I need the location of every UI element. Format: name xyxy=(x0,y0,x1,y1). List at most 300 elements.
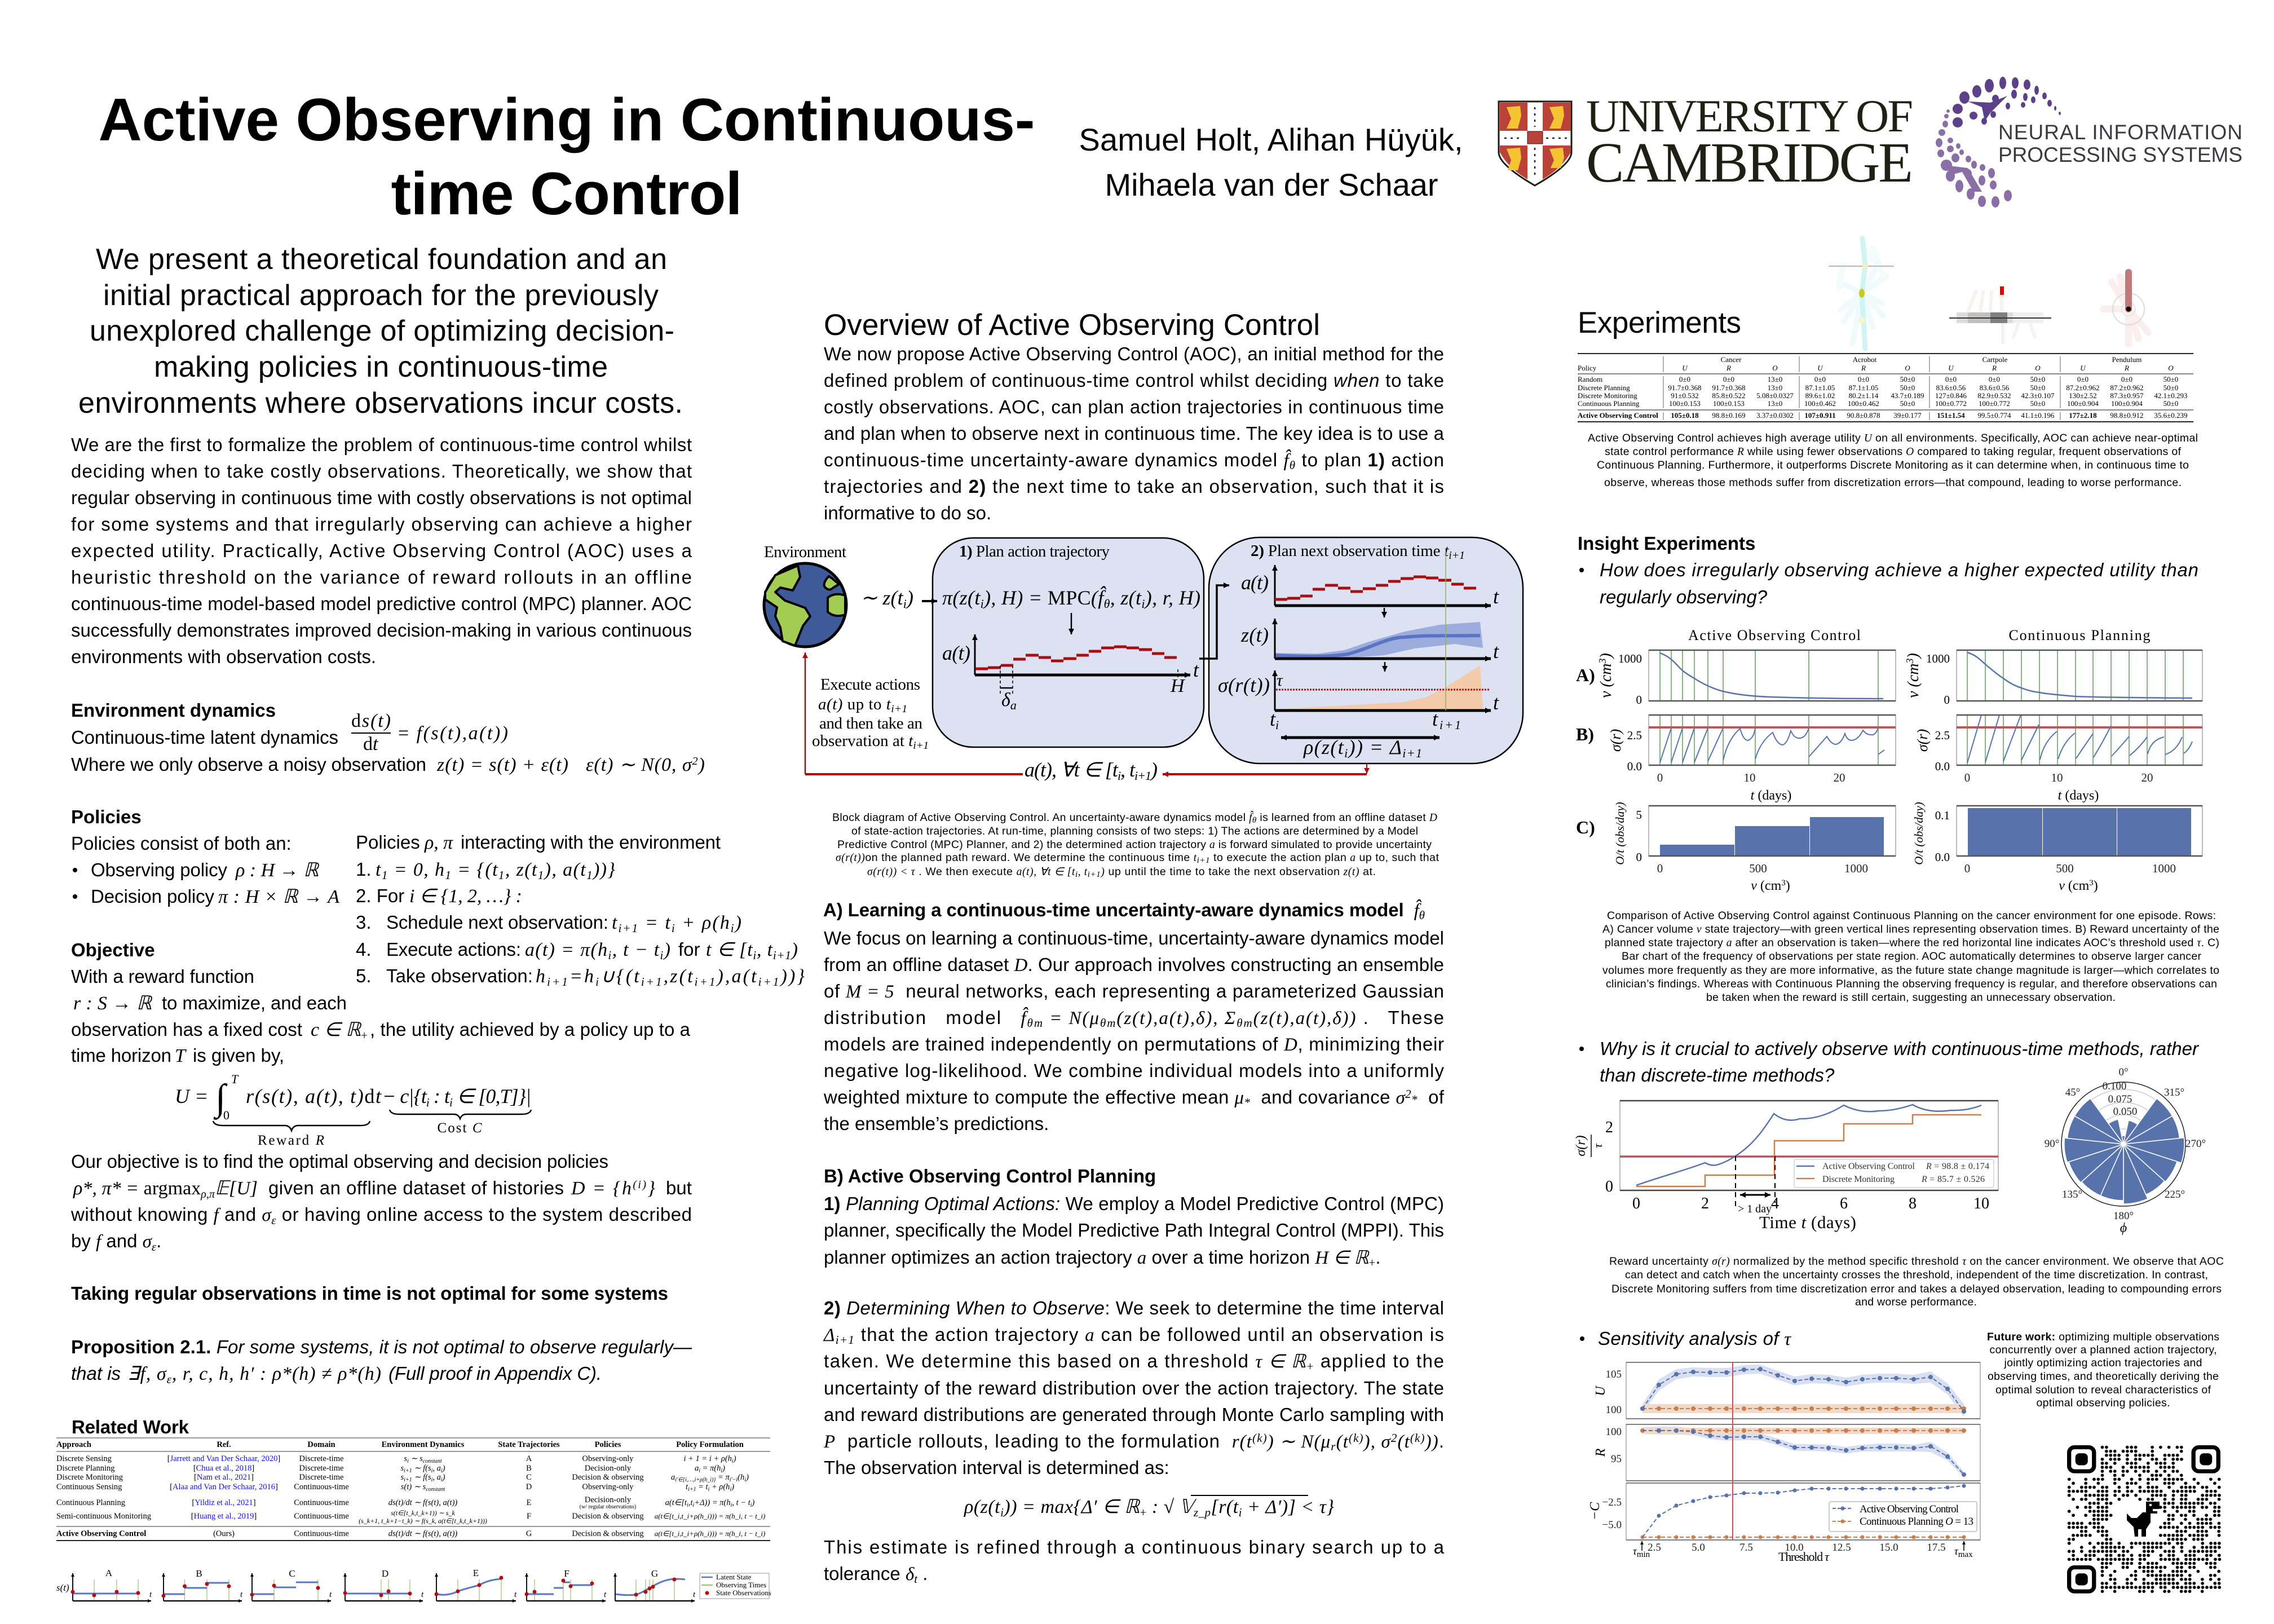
x axis labels: 7.5 xyxy=(1739,1542,1753,1554)
chart B left: uncertainty AOC: t (days) xyxy=(1751,788,1791,803)
section: B planning: applied to the xyxy=(1314,1351,1444,1371)
logo: University of Cambridge: CAMBRIDGE xyxy=(1586,131,1913,194)
equation: utility xyxy=(175,1072,531,1148)
arrow: plan into next observation xyxy=(1199,585,1229,659)
text block: diagram caption: σ(r(t))on the planned path reward. We determine the continuous time t xyxy=(836,851,1196,864)
x axis labels xyxy=(1633,1541,1973,1564)
list: interaction steps: 1 xyxy=(445,868,451,882)
text block: abstract paragraph: We are the first to formalize the problem of continuous-time control whilst xyxy=(71,434,692,455)
table rows: 43.7±0.189 xyxy=(1891,391,1924,400)
table rows: Active Observing Control xyxy=(56,1529,146,1538)
table rows: 13±0 xyxy=(1768,383,1782,392)
table header: R xyxy=(2124,364,2129,372)
section: objective: (i) xyxy=(633,1179,646,1191)
subplot: reward xyxy=(1593,1424,1980,1481)
section: environment dynamics: Environment dynamics xyxy=(71,700,276,721)
text block: abstract paragraph: for some systems and that irregularly observing can achieve a higher xyxy=(71,514,692,535)
text block: uncertainty caption: Reward uncertainty σ(r) normalized by the method specific threshold τ on the cancer environment. We observe that AOC xyxy=(1609,1255,2224,1268)
text block: execute actions: observation at t xyxy=(812,732,913,750)
x axis labels: 15.0 xyxy=(1879,1542,1898,1554)
table header xyxy=(56,1440,744,1449)
chart B left: uncertainty AOC: σ(r) xyxy=(1608,729,1624,752)
table: related work xyxy=(56,1438,770,1541)
table rows: 87.2±0.962 xyxy=(2110,383,2144,392)
label: observing policy equation: )) = Δ xyxy=(1348,736,1402,758)
QR data modules xyxy=(2069,1448,2220,1591)
chart: planned action a(t) xyxy=(942,634,1199,712)
chart: reward uncertainty sigma: σ(r(t)) xyxy=(1218,674,1270,696)
section: B planning: The observation interval is determined as: xyxy=(824,1457,1169,1478)
table header: R xyxy=(1992,364,1997,372)
table rows: +Δ)) = π(h xyxy=(694,1498,731,1507)
table header: Acrobot xyxy=(1853,355,1877,364)
chart: action a(t) xyxy=(1241,565,1499,608)
section: A learning dynamics xyxy=(823,899,1445,1134)
text block: abstract paragraph: heuristic threshold on the variance of reward rollouts in an offline xyxy=(71,567,692,588)
chart C left: observation frequency AOC: 500 xyxy=(1749,862,1767,875)
table rows: 0±0 xyxy=(1989,375,2000,383)
list: interaction steps: i xyxy=(753,948,756,962)
proposition: ∃f, σ xyxy=(127,1363,166,1384)
text block: diagram caption: a up to, such that xyxy=(1350,851,1439,864)
text block: intro statement: making policies in continuous-time xyxy=(154,351,608,383)
chart B right: uncertainty continuous planning: t (days) xyxy=(2058,788,2099,803)
chart: normalized reward uncertainty: 8 xyxy=(1909,1195,1917,1212)
table rows: 0±0 xyxy=(2121,375,2132,383)
table rows: Decision & observing xyxy=(572,1529,644,1538)
chart C right: observation frequency continuous planning: 500 xyxy=(2056,862,2074,875)
list: policy types: Decision policy xyxy=(91,886,214,907)
schematic A xyxy=(71,1568,152,1601)
subplot: reward: R xyxy=(1593,1448,1608,1457)
table header: R xyxy=(1861,364,1866,372)
chart: sensitivity analysis xyxy=(1588,1362,1980,1564)
section: A learning dynamics: weighted mixture to compute the effective mean μ xyxy=(824,1087,1244,1108)
text block: overview paragraph: We now propose Active Observing Control (AOC), an initial method for the xyxy=(824,343,1444,364)
table rows: ds(t)/dt ∼ f(s(t), a(t)) xyxy=(388,1529,457,1538)
section: environment dynamics: 2 xyxy=(692,755,698,767)
list: interaction steps: i xyxy=(660,948,664,962)
table rows: 91.7±0.368 xyxy=(1712,383,1746,392)
table header: Ref. xyxy=(217,1440,231,1449)
schematic A: A xyxy=(105,1568,113,1578)
proposition: ε xyxy=(167,1373,172,1386)
table rows: i xyxy=(731,1502,732,1508)
table rows: 80.2±1.14 xyxy=(1849,391,1879,400)
table rows: C xyxy=(526,1473,532,1482)
table rows: ) xyxy=(722,1464,725,1473)
panel: plan action trajectory: ), r, H) xyxy=(1144,586,1200,609)
text block: abstract paragraph xyxy=(71,434,692,667)
chart A right: cancer volume continuous planning: 0 xyxy=(1944,693,1950,707)
table rows: i xyxy=(441,1468,443,1474)
list: interaction steps: Policies xyxy=(356,832,420,853)
section: objective: D = {h xyxy=(571,1178,632,1199)
panel: plan action trajectory: 1) Plan action trajectory xyxy=(959,542,1110,561)
text block: overview paragraph: θ xyxy=(1290,458,1295,472)
label: observing policy equation: ρ(z(t xyxy=(1304,736,1344,758)
section: B planning: a can be followed until an observation is xyxy=(1085,1324,1444,1345)
list: interaction steps: Schedule next observation: xyxy=(386,912,608,933)
table header: U xyxy=(1817,364,1823,372)
table rows: 100±0.153 xyxy=(1713,399,1745,408)
legend: Continuous Planning O = 13 xyxy=(1860,1516,1973,1528)
chart: planned action a(t): t xyxy=(1193,659,1199,681)
section: A learning dynamics: = N(μ xyxy=(1044,1008,1099,1029)
section: A learning dynamics: of M = 5 neural networks, each representing a parameterized Gaussian xyxy=(824,981,1444,1002)
label: observation z(ti): ∼ z(t xyxy=(860,586,903,609)
section: A learning dynamics: θ xyxy=(1419,908,1425,922)
panel: plan action trajectory: π(z(t xyxy=(942,586,980,609)
list: interaction steps: i xyxy=(595,975,599,988)
table rows: 82.9±0.532 xyxy=(1977,391,2011,400)
table rows: Continuous-time xyxy=(294,1498,349,1507)
section: A learning dynamics: negative log-likelihood. We combine individual models into a uniformly xyxy=(824,1060,1445,1081)
icon: earth xyxy=(764,563,846,647)
heading: experiments: Experiments xyxy=(1578,306,1741,339)
equation: utility: i xyxy=(449,1096,453,1109)
section: A learning dynamics: A) Learning a continuous-time uncertainty-aware dynamics model f̂ xyxy=(823,899,1419,921)
text block: future work: observing times, and theoretically deriving the xyxy=(1988,1370,2219,1383)
legend: Active Observing Control xyxy=(1822,1162,1915,1171)
chart C left: observation frequency AOC: 0 xyxy=(1636,850,1642,864)
table rows: a xyxy=(695,1464,699,1473)
text block: diagram caption: Predictive Control (MPC) Planner, and 2) the determined action trajectory a is forward simulated to provide uncertainty xyxy=(837,839,1432,851)
chart: latent z(t) with uncertainty band: z(t) xyxy=(1240,624,1269,646)
table header: Pendulum xyxy=(2112,355,2141,364)
chart group: AOC vs continuous planning: Continuous Planning xyxy=(2008,627,2151,643)
list: interaction steps: i xyxy=(731,921,734,935)
list: interaction steps: i+1 xyxy=(758,975,779,988)
table rows: = π xyxy=(716,1473,730,1482)
icon: dinosaur xyxy=(2127,1502,2160,1537)
equation: observation interval: : √ 𝕍 xyxy=(1147,1497,1197,1517)
title: Active Observing in Continuous- xyxy=(98,86,1035,153)
list: interaction steps: ) xyxy=(734,912,741,933)
table rows: 127±0.846 xyxy=(1935,391,1967,400)
label: action range: i+1 xyxy=(1134,769,1151,783)
text block: execute actions: i+1 xyxy=(891,703,907,715)
list: interaction steps: ,z(t xyxy=(664,966,694,987)
schematic D xyxy=(343,1568,424,1601)
table rows: 87.1±1.05 xyxy=(1849,383,1878,392)
section: A learning dynamics: the ensemble’s predictions. xyxy=(824,1113,1049,1134)
equation: utility: : t xyxy=(429,1085,451,1107)
table rows: [Jarrett and Van Der Schaar, 2020] xyxy=(167,1454,280,1463)
label: action range: ) xyxy=(1150,758,1158,781)
table rows: (w/ regular observations) xyxy=(580,1504,636,1510)
section: policies: Policies xyxy=(71,806,142,827)
section: environment dynamics: dt xyxy=(363,734,379,754)
chart: normalized reward uncertainty: τ xyxy=(1591,1143,1605,1148)
section: B planning: ) ∼ N(μ xyxy=(1266,1432,1330,1452)
chart C left: observation frequency AOC: 3 xyxy=(1781,879,1786,888)
section: environment dynamics: ds(t) xyxy=(351,710,391,731)
section: objective: given an offline dataset of histories xyxy=(268,1177,564,1198)
table header: Domain xyxy=(307,1440,335,1449)
schematic C: t xyxy=(329,1590,332,1599)
chart C right: observation frequency continuous planning: 0.1 xyxy=(1935,809,1950,822)
text block: future work: jointly optimizing action trajectories and xyxy=(2004,1357,2202,1369)
table rows: , t − t xyxy=(732,1498,751,1507)
chart group: AOC vs continuous planning: Active Observing Control xyxy=(1688,627,1861,643)
table rows: Semi-continuous Monitoring xyxy=(56,1512,151,1521)
list: interaction steps: i+1 xyxy=(695,975,715,988)
text block: diagram caption: i+1 xyxy=(1197,856,1210,865)
label: observing policy equation: i xyxy=(1344,746,1348,760)
schematic G: t xyxy=(693,1590,696,1599)
text block: abstract paragraph: deciding when to take costly observations. Theoretically, we show that xyxy=(71,461,692,482)
text block: uncertainty caption: can detect and catch when the uncertainty crosses the threshold, independent of the time discretization. In contrast, xyxy=(1625,1269,2208,1281)
table rows: ∼ s xyxy=(409,1454,423,1463)
text block: diagram caption: D xyxy=(1429,812,1437,824)
panel: plan next observation time: 2) Plan next observation time t xyxy=(1251,542,1449,560)
section: environment dynamics: = f(s(t),a(t)) xyxy=(398,723,508,744)
table rows: 0±0 xyxy=(1858,375,1869,383)
section: objective: is given by, xyxy=(193,1045,284,1066)
table rows: 99.5±0.774 xyxy=(1977,411,2011,420)
section: B planning: taken. We determine this based on a threshold τ ∈ ℝ xyxy=(824,1351,1306,1372)
x axis labels: 5.0 xyxy=(1692,1542,1705,1554)
x axis labels: 17.5 xyxy=(1927,1542,1946,1554)
list: interaction steps: h xyxy=(536,966,545,987)
list: interaction steps: = t xyxy=(639,912,671,933)
list: policy types: Observing policy xyxy=(91,859,228,880)
question: continuous-time methods xyxy=(1579,1038,2200,1085)
text block: execute actions: a(t) up to t xyxy=(818,695,891,713)
table header: O xyxy=(1905,364,1910,372)
table rows: i+1 xyxy=(688,1486,696,1493)
legend: schematics: Observing Times xyxy=(716,1581,766,1589)
chart: normalized reward uncertainty: Time t (days) xyxy=(1759,1212,1856,1232)
section: B planning: i+1 xyxy=(836,1333,854,1347)
table rows: a(t∈[t xyxy=(665,1498,687,1507)
text block: uncertainty caption xyxy=(1609,1255,2224,1308)
text block: overview paragraph: costly observations. AOC, can plan action trajectories in continuous time xyxy=(824,396,1444,417)
table rows: 151±1.54 xyxy=(1937,411,1965,420)
subplot: utility: U xyxy=(1593,1385,1608,1396)
table rows: s xyxy=(400,1473,404,1482)
table rows: 0±0 xyxy=(1723,375,1734,383)
table rows: Decision & observing xyxy=(572,1473,644,1482)
list: interaction steps: i+1 xyxy=(641,975,662,988)
table rows: i xyxy=(730,1486,731,1493)
chart B left: uncertainty AOC: 20 xyxy=(1834,771,1845,784)
schematic E: E xyxy=(473,1568,479,1578)
chart C right: observation frequency continuous planning: 1000 xyxy=(2152,862,2176,875)
chart B left: uncertainty AOC xyxy=(1608,715,1896,803)
schematic D: D xyxy=(382,1568,388,1579)
text block: execute actions: i+1 xyxy=(913,740,929,752)
table rows: i xyxy=(687,1502,688,1508)
list: interaction steps: i xyxy=(672,921,675,935)
illustration: cartpole xyxy=(1949,286,2051,344)
icon: QR code xyxy=(2069,1448,2220,1591)
list: interaction steps: ) xyxy=(663,939,670,960)
table rows: Continuous Planning xyxy=(1578,399,1640,408)
table rows: i xyxy=(708,1486,710,1493)
list: interaction steps: ρ, π xyxy=(424,832,453,853)
chart: normalized reward uncertainty: 0 xyxy=(1605,1178,1613,1195)
chart: polar histogram: 90° xyxy=(2045,1138,2059,1150)
table rows: A xyxy=(526,1454,532,1463)
list: interaction steps: for xyxy=(678,939,700,960)
table header: O xyxy=(2035,364,2041,372)
equation: observation interval: + Δ′)] < τ} xyxy=(1242,1497,1334,1517)
table header: U xyxy=(1948,364,1954,372)
chart: normalized reward uncertainty: σ(r) xyxy=(1574,1135,1588,1157)
table rows: 50±0 xyxy=(2030,375,2045,383)
equation: utility: i xyxy=(426,1096,430,1109)
section: environment dynamics: z(t) = s(t) + ε(t) xyxy=(436,754,568,775)
table rows: 177±2.18 xyxy=(2069,411,2097,420)
heading: insight experiments: Insight Experiments xyxy=(1578,533,1755,554)
list: interaction steps: i xyxy=(608,948,611,962)
table rows: (s_k+1, t_k+1−t_k) ∼ f(s_k, a(t∈[t_k,t_k+1))) xyxy=(359,1517,487,1525)
list: interaction steps: 3. xyxy=(356,912,372,933)
chart A left: cancer volume AOC: 3 xyxy=(1597,658,1608,664)
logo: University of Cambridge: UNIVERSITY OF xyxy=(1586,90,1913,142)
chart B right: uncertainty continuous planning: σ(r) xyxy=(1914,729,1931,752)
chart: polar histogram: 0° xyxy=(2118,1066,2129,1078)
table rows: 50±0 xyxy=(2030,383,2045,392)
text block: uncertainty caption: and worse performance. xyxy=(1855,1296,1977,1308)
list: interaction steps: 4. xyxy=(356,939,372,960)
equation: utility: Reward R xyxy=(258,1133,324,1148)
list: interaction steps: = 0, h xyxy=(388,859,444,880)
arrow: observation into planner xyxy=(922,600,937,602)
table rows: = t xyxy=(696,1482,709,1491)
table header: State Trajectories xyxy=(498,1440,560,1449)
table rows: E xyxy=(527,1498,532,1507)
section: objective: by f and σ xyxy=(71,1230,152,1252)
list: interaction steps: ) xyxy=(791,939,798,960)
text block: future work: concurrently over a planned action trajectory, xyxy=(1989,1344,2217,1356)
section: A learning dynamics: σ xyxy=(1396,1088,1406,1108)
authors: Mihaela van der Schaar xyxy=(1105,167,1438,202)
list: interaction steps: 1 xyxy=(538,868,544,882)
table rows: 5.08±0.0327 xyxy=(1756,391,1794,400)
table rows: 83.6±0.56 xyxy=(1936,383,1966,392)
table rows: Random xyxy=(1578,375,1602,383)
section: B planning: P particle rollouts, leading to the formulation r(t xyxy=(824,1431,1252,1452)
chart: normalized reward uncertainty xyxy=(1574,1101,1998,1232)
text block: diagram caption: , t xyxy=(1078,866,1088,878)
panel: plan action trajectory: ), H) = xyxy=(983,586,1048,609)
table header xyxy=(1578,355,2174,372)
text block: abstract paragraph: successfully demonstrates improved decision-making in various continuous xyxy=(71,620,692,641)
subplot: cost: −2.5 xyxy=(1602,1497,1622,1508)
table rows: 130±2.52 xyxy=(2069,391,2097,400)
chart B right: uncertainty continuous planning: 2.5 xyxy=(1935,729,1950,742)
table rows: Decision-only xyxy=(585,1495,632,1504)
table rows: Discrete Sensing xyxy=(56,1454,112,1463)
section: A learning dynamics: . These xyxy=(1363,1007,1444,1028)
section: B planning: + xyxy=(1307,1360,1313,1373)
question: continuous-time methods: than discrete-time methods? xyxy=(1600,1065,1835,1085)
list: interaction steps: a(t) = π(h xyxy=(525,939,607,960)
subplot: utility xyxy=(1593,1362,1980,1419)
equation: utility: 0 xyxy=(223,1108,229,1122)
section: B planning: t xyxy=(914,1572,918,1586)
chart C right: observation frequency continuous planning: 0 xyxy=(1964,862,1970,875)
table header: Environment Dynamics xyxy=(382,1440,465,1449)
table rows: ∼ f(s xyxy=(412,1464,431,1473)
table rows: constant xyxy=(423,1458,442,1464)
table rows: 50±0 xyxy=(1900,375,1915,383)
table rows: 87.2±0.962 xyxy=(2066,383,2100,392)
chart: action a(t): a(t) xyxy=(1241,571,1269,594)
proposition xyxy=(71,1336,692,1386)
chart: normalized reward uncertainty: 2 xyxy=(1701,1195,1709,1212)
chart B left: uncertainty AOC: 0.0 xyxy=(1627,760,1642,773)
text block: comparison caption: Comparison of Active Observing Control against Continuous Planning on the cancer environment for one episode. Rows: xyxy=(1607,910,2216,922)
section: B planning: Δ xyxy=(823,1325,834,1345)
section: B planning: tolerance δ xyxy=(824,1563,914,1585)
question: continuous-time methods: Why is it crucial to actively observe with continuous-time methods, rather xyxy=(1600,1038,2200,1059)
table rows: [Yildiz et al., 2021] xyxy=(192,1498,256,1507)
list: interaction steps: Take observation: xyxy=(386,965,533,986)
text block: intro statement: initial practical approach for the previously xyxy=(103,279,659,312)
section: A learning dynamics: and covariance xyxy=(1250,1087,1396,1107)
table rows: 87.1±1.05 xyxy=(1805,383,1835,392)
section: B planning: ), σ xyxy=(1363,1432,1392,1452)
list: policy types: ρ : H → ℝ xyxy=(235,860,320,881)
section: B planning: 1) Planning Optimal Actions: We employ a Model Predictive Control (MPC) xyxy=(824,1193,1444,1214)
legend: R = 85.7 ± 0.526 xyxy=(1921,1175,1985,1184)
table rows: 42.3±0.107 xyxy=(2021,391,2055,400)
heading: related work: Related Work xyxy=(72,1416,189,1437)
chart A left: cancer volume AOC: 1000 xyxy=(1618,652,1642,665)
chart A left: cancer volume AOC xyxy=(1597,650,1896,707)
legend: schematics: Latent State xyxy=(716,1573,752,1581)
table header: O xyxy=(2168,364,2174,372)
table rows: , a xyxy=(432,1464,441,1473)
list: interaction steps: , z(t xyxy=(505,859,538,880)
text block: comparison caption xyxy=(1602,910,2219,1004)
chart: planned action a(t): a(t) xyxy=(942,642,970,664)
list: interaction steps: t ∈ [t xyxy=(706,939,753,960)
text block: comparison caption: be taken when the reward is still certain, suggesting an unnecessary observation. xyxy=(1706,991,2116,1004)
section: objective: c ∈ ℝ xyxy=(311,1020,361,1040)
list: interaction steps: i+1 xyxy=(773,948,791,962)
subplot: cost xyxy=(1588,1483,1980,1540)
section: B planning: (t xyxy=(1336,1432,1349,1452)
list: interaction steps: t xyxy=(612,912,617,933)
chart C left: observation frequency AOC: 0 xyxy=(1657,862,1663,875)
text block: overview paragraph xyxy=(824,343,1445,523)
chart: planned action a(t): δ xyxy=(1001,690,1010,710)
text block: comparison caption: A) Cancer volume v state trajectory—with green vertical lines representing observation times. B) Reward uncertainty of the xyxy=(1602,923,2219,935)
table rows: 0±0 xyxy=(1945,375,1957,383)
table rows: 3.37±0.0302 xyxy=(1756,411,1794,420)
schematic B: t xyxy=(240,1590,243,1599)
schematic C xyxy=(250,1568,332,1601)
schematic F xyxy=(524,1568,607,1601)
table rows: + ρ(h xyxy=(709,1482,730,1491)
label: environment: Environment xyxy=(764,543,846,561)
label: action range: i xyxy=(1118,769,1121,783)
equation: observation interval: ρ(z(t xyxy=(964,1497,1000,1517)
table header: U xyxy=(2080,364,2086,372)
section: objective: Our objective is to find the optimal observing and decision policies xyxy=(71,1151,608,1172)
section: B planning: . xyxy=(1375,1247,1380,1268)
list: interaction steps: 2. For xyxy=(356,885,404,906)
chart: reward uncertainty sigma: τ xyxy=(1277,671,1283,690)
table rows: Observing-only xyxy=(582,1454,634,1463)
list: interaction steps: i+1 xyxy=(547,975,568,988)
chart C left: observation frequency AOC xyxy=(1613,802,1896,893)
